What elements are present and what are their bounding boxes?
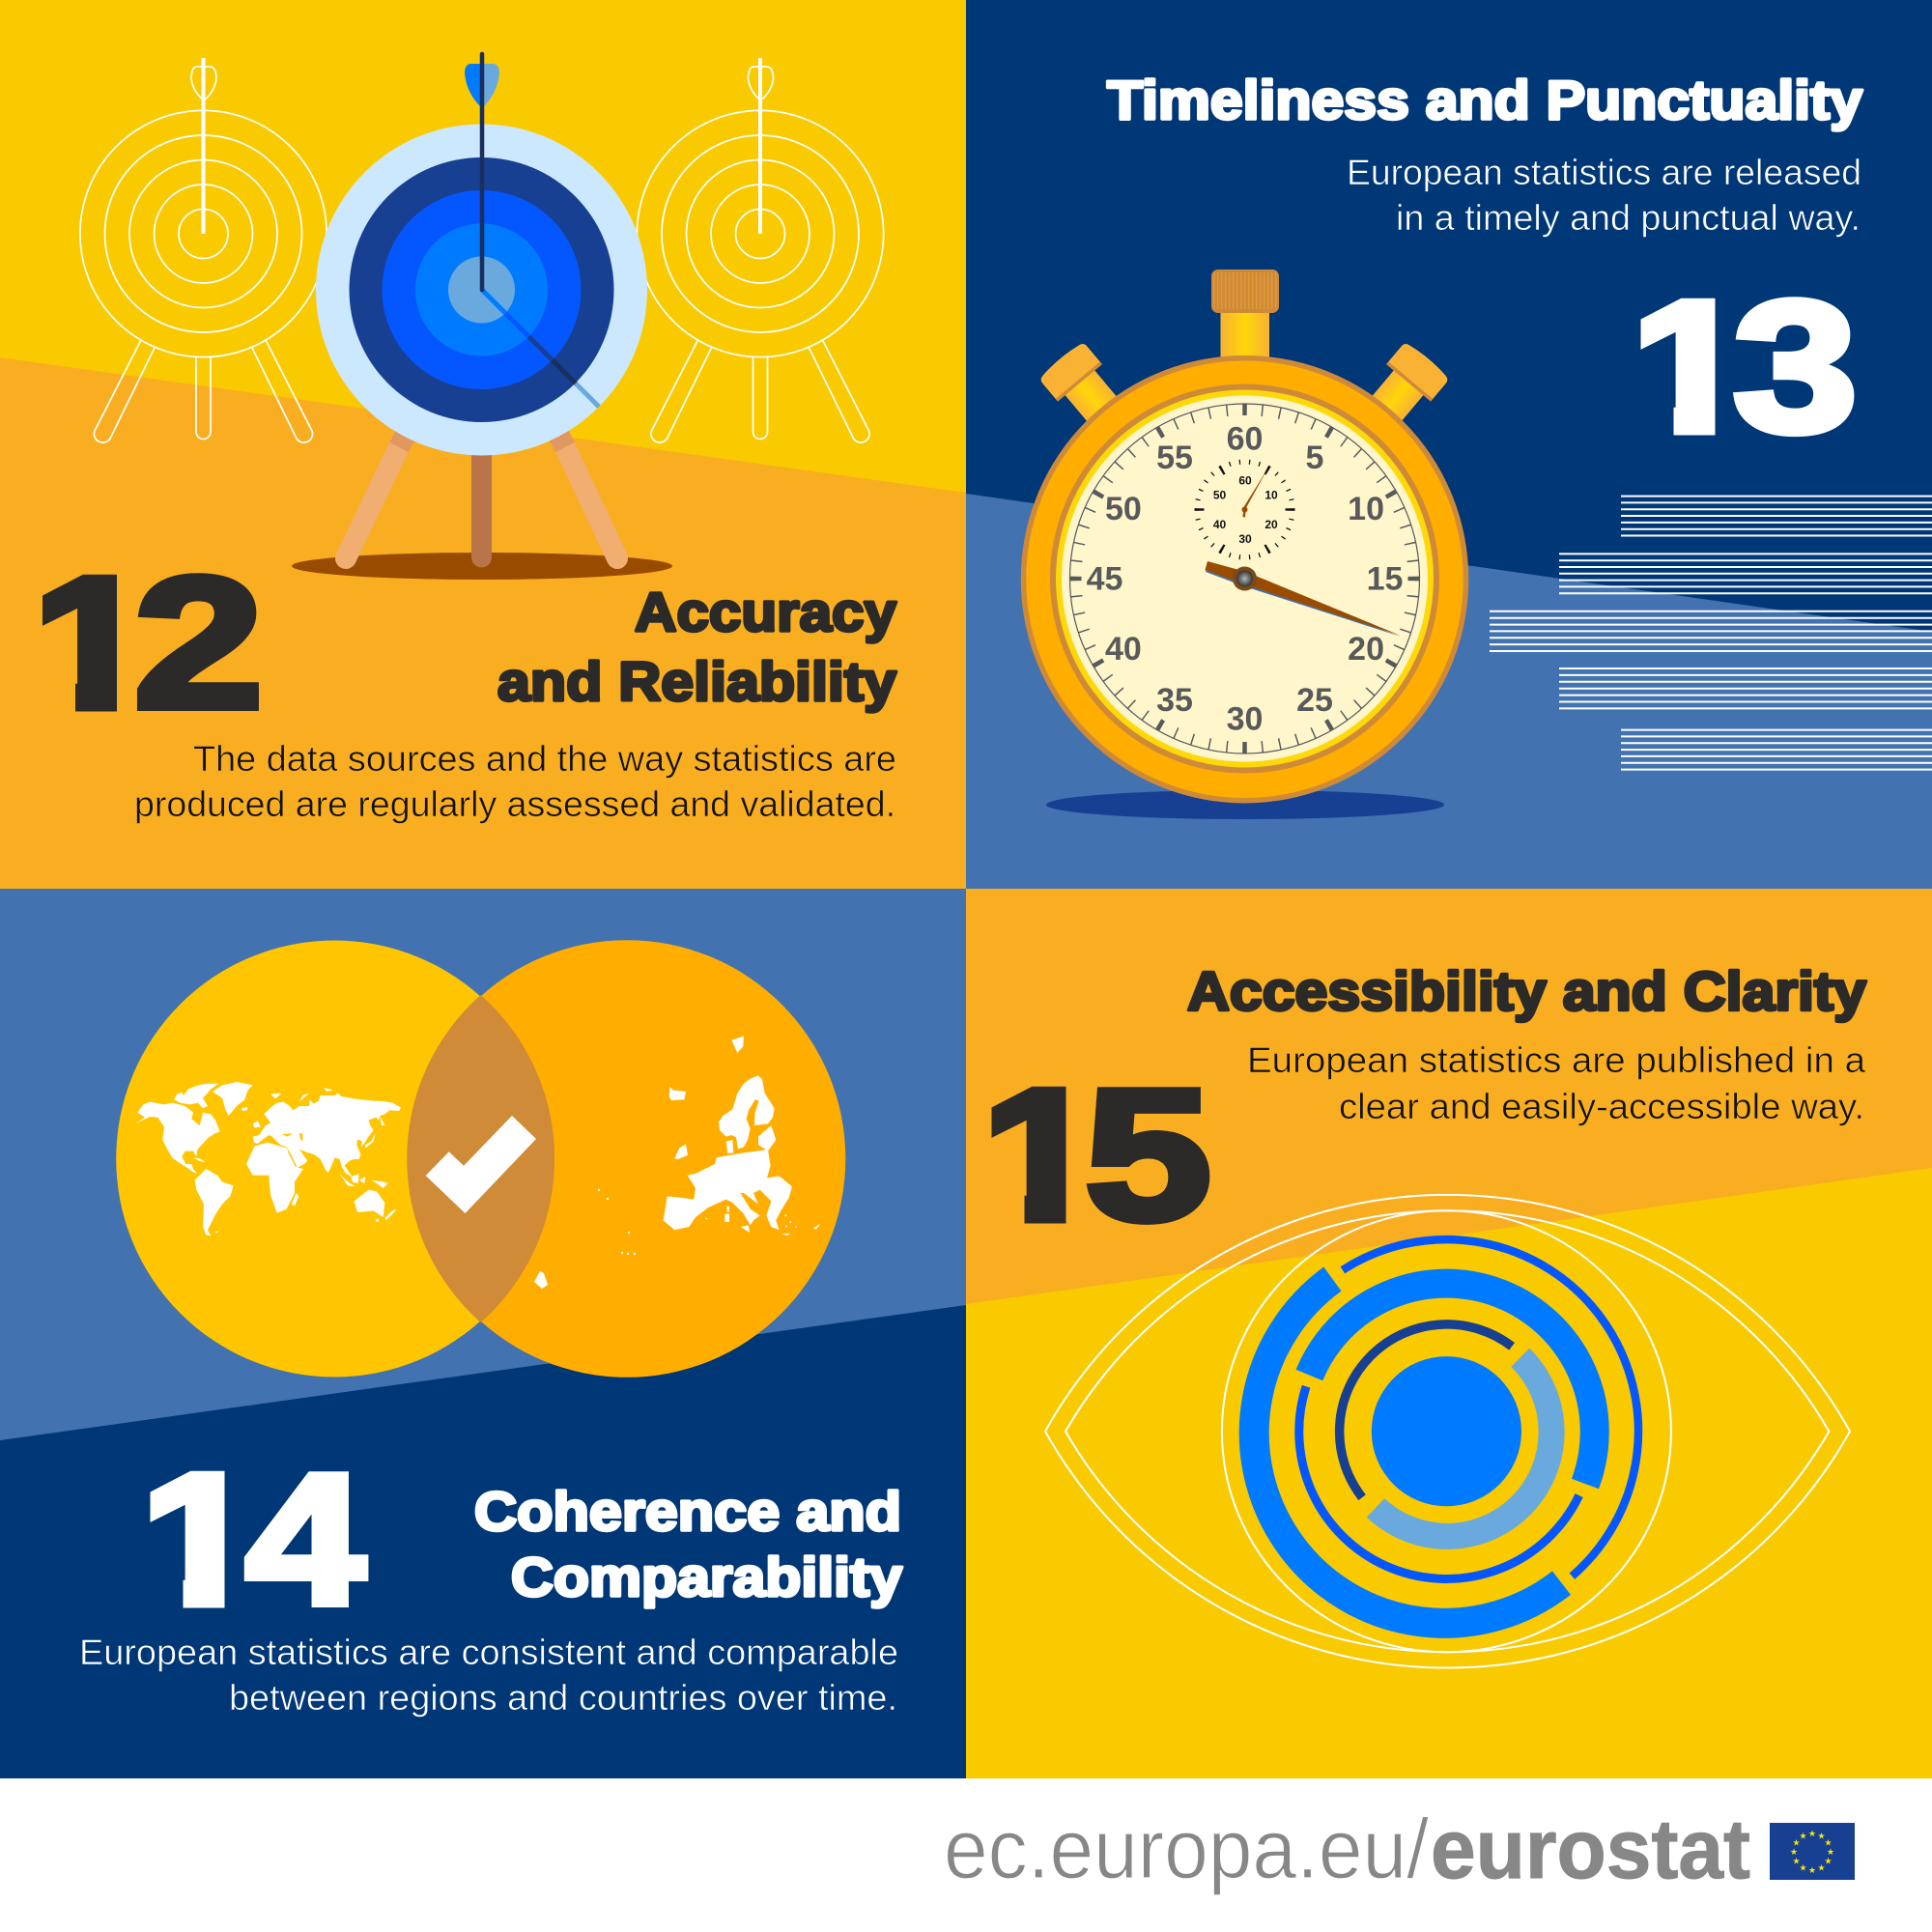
icon: EU flag: ★ xyxy=(1792,1857,1801,1866)
icon: overseas territories xyxy=(534,1189,636,1289)
panel: timeliness and punctuality xyxy=(966,0,1932,889)
icon: stopwatch: 5 xyxy=(1306,440,1323,476)
icon: main target with stand and arrow xyxy=(292,54,672,580)
icon: stopwatch: 20 xyxy=(1348,631,1384,668)
number 15: 1 xyxy=(978,1050,1107,1259)
panel: accessibility and clarity xyxy=(966,889,1932,1778)
number 13: 1 xyxy=(1627,262,1756,470)
footer xyxy=(0,1778,1932,1932)
icon: EU flag: ★ xyxy=(1808,1829,1816,1838)
number 12 xyxy=(43,573,259,711)
heading: Timeliness and Punctuality xyxy=(1107,70,1862,131)
eurostat text: eurostat xyxy=(1431,1803,1750,1896)
number 13 xyxy=(1640,297,1855,437)
icon: stopwatch xyxy=(1024,270,1466,819)
icon: EU flag xyxy=(1770,1823,1855,1880)
icon: stopwatch: 55 xyxy=(1156,440,1193,476)
number 13: 3 xyxy=(1733,262,1858,470)
number 14: 1 xyxy=(136,1435,266,1643)
icon: stopwatch: 50 xyxy=(1213,489,1226,502)
icon: EU flag: ★ xyxy=(1799,1862,1807,1872)
icon: EU flag: ★ xyxy=(1824,1837,1833,1847)
icon: eye xyxy=(1045,1195,1850,1668)
icon: stopwatch: 50 xyxy=(1105,491,1142,527)
icon: check mark xyxy=(426,1116,536,1213)
icon: stopwatch: 25 xyxy=(1296,682,1333,719)
speed lines xyxy=(1490,497,1932,770)
number 14 xyxy=(151,1470,369,1607)
body text: in a timely and punctual way. xyxy=(1396,198,1861,238)
body text: between regions and countries over time. xyxy=(229,1678,897,1718)
icon: stopwatch: 15 xyxy=(1367,560,1403,597)
icon: EU flag: ★ xyxy=(1827,1847,1834,1857)
heading: Accessibility and Clarity xyxy=(1187,960,1866,1022)
icon: world map eurasia africa xyxy=(246,1088,401,1222)
icon: EU flag: ★ xyxy=(1817,1862,1826,1872)
icon: stopwatch: 30 xyxy=(1238,532,1252,546)
number 15 xyxy=(991,1086,1209,1225)
number 12: 2 xyxy=(134,538,264,747)
icon: stopwatch: 10 xyxy=(1264,489,1278,502)
body text: European statistics are released xyxy=(1347,153,1861,192)
icon: venn diagram xyxy=(116,940,845,1378)
icon: EU flag: ★ xyxy=(1790,1847,1798,1857)
body text xyxy=(79,1633,898,1718)
panel: accuracy and reliability xyxy=(0,0,966,889)
panel: coherence and comparability xyxy=(0,889,966,1778)
heading: accuracy: Accuracy xyxy=(635,582,896,643)
heading: and reliability: and Reliability xyxy=(497,651,896,713)
icon: stopwatch: 60 xyxy=(1238,473,1252,487)
icon: EU flag: ★ xyxy=(1817,1832,1826,1841)
icon: europe map xyxy=(664,1037,820,1236)
body text: produced are regularly assessed and validated. xyxy=(134,784,895,824)
body text: clear and easily-accessible way. xyxy=(1339,1087,1864,1126)
icon: stopwatch: 35 xyxy=(1156,682,1193,719)
body text: European statistics are consistent and comparable xyxy=(79,1633,898,1672)
number 14: 4 xyxy=(245,1435,365,1643)
icon: EU flag: ★ xyxy=(1808,1865,1816,1875)
icon: outline target right xyxy=(637,58,884,442)
body text xyxy=(1347,153,1861,238)
body text: The data sources and the way statistics are xyxy=(193,739,896,779)
heading: comparability: Comparability xyxy=(511,1547,902,1608)
icon: stopwatch: 20 xyxy=(1264,518,1278,531)
icon: stopwatch: 45 xyxy=(1087,560,1122,597)
icon: stopwatch: 30 xyxy=(1227,701,1263,738)
body text xyxy=(134,739,896,824)
icon: stopwatch: 40 xyxy=(1105,631,1142,668)
icon: stopwatch: 60 xyxy=(1227,421,1263,458)
heading: coherence and: Coherence and xyxy=(474,1481,901,1543)
icon: stopwatch: 10 xyxy=(1348,491,1384,527)
body text xyxy=(1247,1040,1865,1126)
icon: EU flag: ★ xyxy=(1792,1837,1801,1847)
icon: EU flag: ★ xyxy=(1824,1857,1833,1866)
body text: European statistics are published in a xyxy=(1247,1040,1865,1080)
number 12: 1 xyxy=(29,538,158,747)
icon: outline target left xyxy=(80,58,327,442)
url text: ec.europa.eu/ xyxy=(944,1803,1430,1896)
icon: stopwatch: 40 xyxy=(1213,518,1226,531)
number 15: 5 xyxy=(1085,1050,1211,1259)
icon: world map americas xyxy=(135,1082,253,1236)
icon: EU flag: ★ xyxy=(1799,1832,1807,1841)
